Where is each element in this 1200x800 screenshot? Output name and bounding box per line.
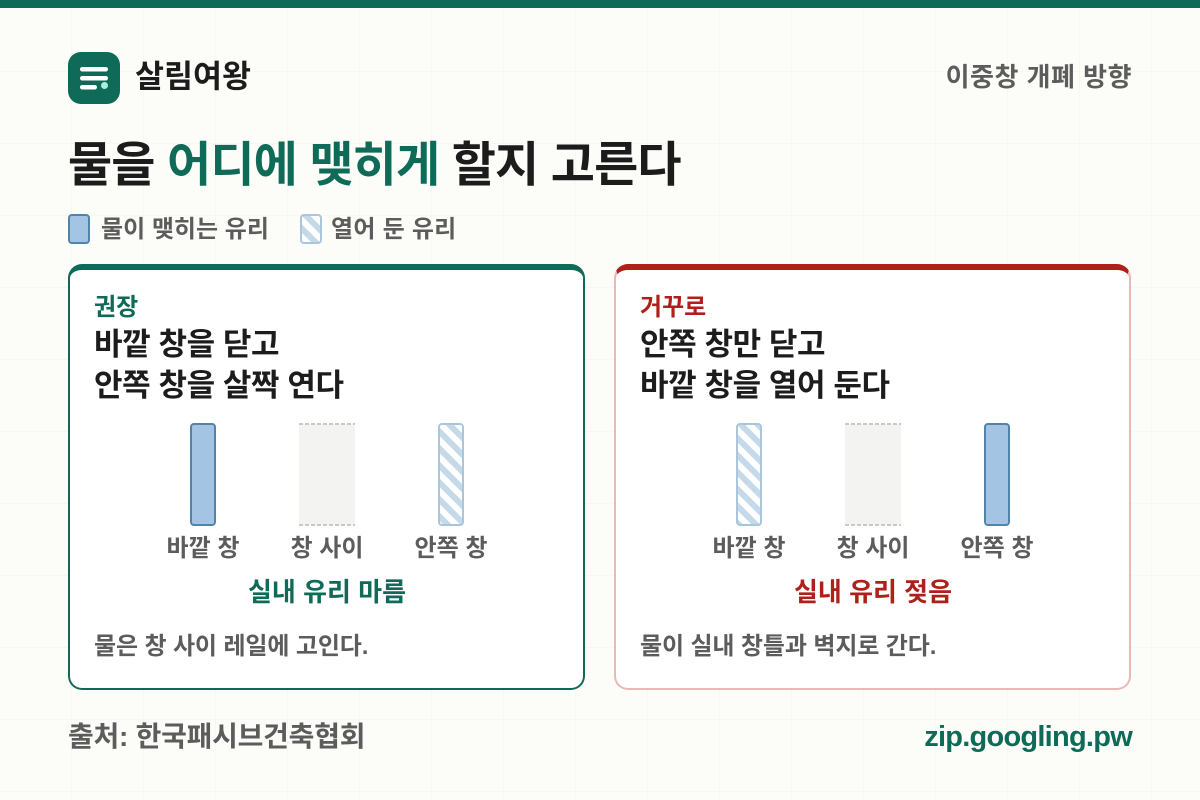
panel tag: 거꾸로 (640, 294, 706, 321)
label: inner window: 안쪽 창 (415, 535, 487, 562)
panel note: 물은 창 사이 레일에 고인다. (94, 633, 368, 660)
label: outer window: 바깥 창 (167, 535, 239, 562)
label: gap: 창 사이 (291, 535, 363, 562)
icon: brand logo (68, 52, 120, 104)
outer glass wet (191, 424, 215, 525)
diagram: window layers (736, 423, 1010, 526)
brand name: 살림여왕 (135, 58, 251, 94)
source: 출처: 한국패시브건축협회 (68, 721, 365, 752)
panel result: 실내 유리 마름 (248, 577, 406, 607)
diagram: window layers (190, 423, 464, 526)
title: 물을 어디에 맺히게 할지 고른다 (68, 139, 681, 192)
air gap (845, 424, 901, 525)
inner glass wet (985, 424, 1009, 525)
site url: zip.googling.pw (924, 721, 1132, 753)
panel heading: 안쪽 창만 닫고 (640, 327, 825, 362)
outer glass open (737, 424, 761, 525)
panel result: 실내 유리 젖음 (794, 577, 952, 607)
label: gap: 창 사이 (837, 535, 909, 562)
topic label: 이중창 개폐 방향 (946, 62, 1132, 92)
panel: recommended (68, 264, 585, 690)
legend label: open glass: 열어 둔 유리 (331, 216, 456, 243)
legend (68, 214, 456, 244)
label: inner window: 안쪽 창 (961, 535, 1033, 562)
top accent bar (0, 0, 1200, 8)
legend label: condensing glass: 물이 맺히는 유리 (101, 216, 269, 243)
air gap (299, 424, 355, 525)
legend swatch: condensing glass (68, 214, 90, 244)
legend swatch: open glass (300, 214, 322, 244)
inner glass open (439, 424, 463, 525)
panel note: 물이 실내 창틀과 벽지로 간다. (640, 633, 936, 660)
panel heading: 바깥 창을 닫고 (94, 327, 279, 362)
label: outer window: 바깥 창 (713, 535, 785, 562)
panel heading line two: 안쪽 창을 살짝 연다 (94, 368, 344, 403)
panel: reversed (614, 264, 1131, 690)
panel tag: 권장 (94, 294, 138, 321)
panel heading line two: 바깥 창을 열어 둔다 (640, 368, 890, 403)
